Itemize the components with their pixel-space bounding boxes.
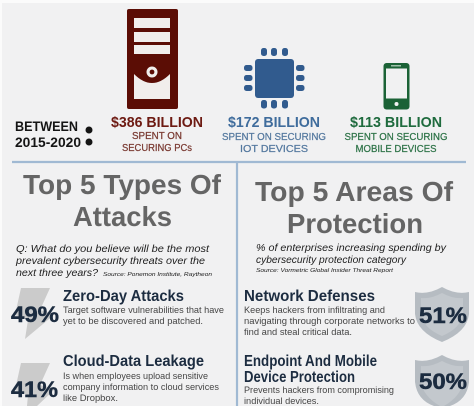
heading: top 5 areas of protection: Protection: [287, 208, 423, 239]
attack item: cloud-data leakage: Cloud-Data Leakage: [63, 353, 204, 370]
text block: protection survey description: cybersecurity protection category: [256, 254, 407, 266]
text block: attacks survey question: Source: Ponemon Institute, Raytheon: [103, 272, 212, 278]
icon: shield: [415, 287, 469, 342]
protection item: network defenses: [244, 287, 469, 342]
attack item: cloud-data leakage: 41%: [11, 377, 58, 402]
text block: protection survey description: % of enterprises increasing spending by: [256, 242, 447, 254]
icon: lightning bolt: [15, 363, 55, 406]
stat: IoT spending: $172 BILLION: [228, 114, 320, 131]
text block: attacks survey question: prevalent cybersecurity threats over the: [15, 255, 205, 267]
label: between 2015-2020: [15, 119, 92, 150]
attack item: cloud-data leakage: Is when employees upload sensitive: [63, 371, 208, 382]
attack item: zero-day attacks: [11, 288, 224, 339]
stat: IoT spending: [222, 114, 326, 155]
icon: IoT chip: [244, 48, 304, 108]
protection item: network defenses: find and steal critical data.: [244, 327, 352, 338]
stat: IoT spending: SPENT ON SECURING: [222, 131, 326, 143]
text block: attacks survey question: [15, 243, 212, 279]
protection item: endpoint and mobile device protection: Endpoint And Mobile: [244, 353, 377, 370]
stat: mobile spending: SPENT ON SECURING: [344, 131, 448, 143]
attack item: cloud-data leakage: company information to cloud services: [63, 382, 219, 393]
attack item: zero-day attacks: yet to be discovered and patched.: [63, 316, 203, 327]
stat: PC spending: [111, 114, 203, 154]
icon: mobile phone: [384, 63, 410, 110]
protection item: network defenses: Keeps hackers from infiltrating and: [244, 305, 385, 316]
icon: lightning bolt: [15, 288, 55, 339]
stat: PC spending: $386 BILLION: [111, 114, 203, 131]
attack item: zero-day attacks: 49%: [11, 302, 59, 327]
text block: attacks survey question: Q: What do you believe will be the most: [16, 243, 210, 255]
heading: top 5 types of attacks: Top 5 Types Of: [23, 169, 222, 200]
icon: shield: [415, 355, 469, 406]
protection item: endpoint and mobile device protection: Device Protection: [244, 369, 355, 386]
protection item: endpoint and mobile device protection: [244, 353, 469, 406]
stat: mobile spending: [344, 114, 448, 155]
heading: top 5 types of attacks: [23, 169, 222, 232]
attack item: cloud-data leakage: [11, 353, 219, 406]
stat: PC spending: SECURING PCs: [122, 142, 192, 154]
heading: top 5 types of attacks: Attacks: [73, 201, 172, 232]
protection item: endpoint and mobile device protection: 50%: [419, 369, 467, 394]
text block: protection survey description: Source: Vormetric Global Insider Threat Report: [256, 268, 394, 274]
stat: PC spending: SPENT ON: [132, 130, 182, 142]
stat: mobile spending: $113 BILLION: [350, 114, 442, 131]
stat: mobile spending: MOBILE DEVICES: [356, 143, 436, 155]
heading: top 5 areas of protection: Top 5 Areas Of: [255, 176, 454, 207]
protection item: network defenses: 51%: [419, 303, 467, 328]
text block: protection survey description: [256, 242, 447, 274]
label: between 2015-2020: 2015-2020: [15, 135, 81, 150]
protection item: endpoint and mobile device protection: Prevents hackers from compromising: [244, 385, 394, 396]
attack item: zero-day attacks: Zero-Day Attacks: [63, 288, 184, 305]
icon: PC tower: [127, 9, 178, 109]
stat: IoT spending: IOT DEVICES: [240, 143, 308, 155]
attack item: cloud-data leakage: like Dropbox.: [63, 393, 118, 404]
protection item: network defenses: navigating through corporate networks to: [244, 316, 415, 327]
protection item: network defenses: Network Defenses: [244, 288, 375, 305]
attack item: zero-day attacks: Target software vulnerabilities that have: [63, 305, 224, 316]
label: between 2015-2020: BETWEEN: [15, 119, 78, 134]
heading: top 5 areas of protection: [255, 176, 454, 239]
text block: attacks survey question: next three years?: [16, 267, 98, 279]
